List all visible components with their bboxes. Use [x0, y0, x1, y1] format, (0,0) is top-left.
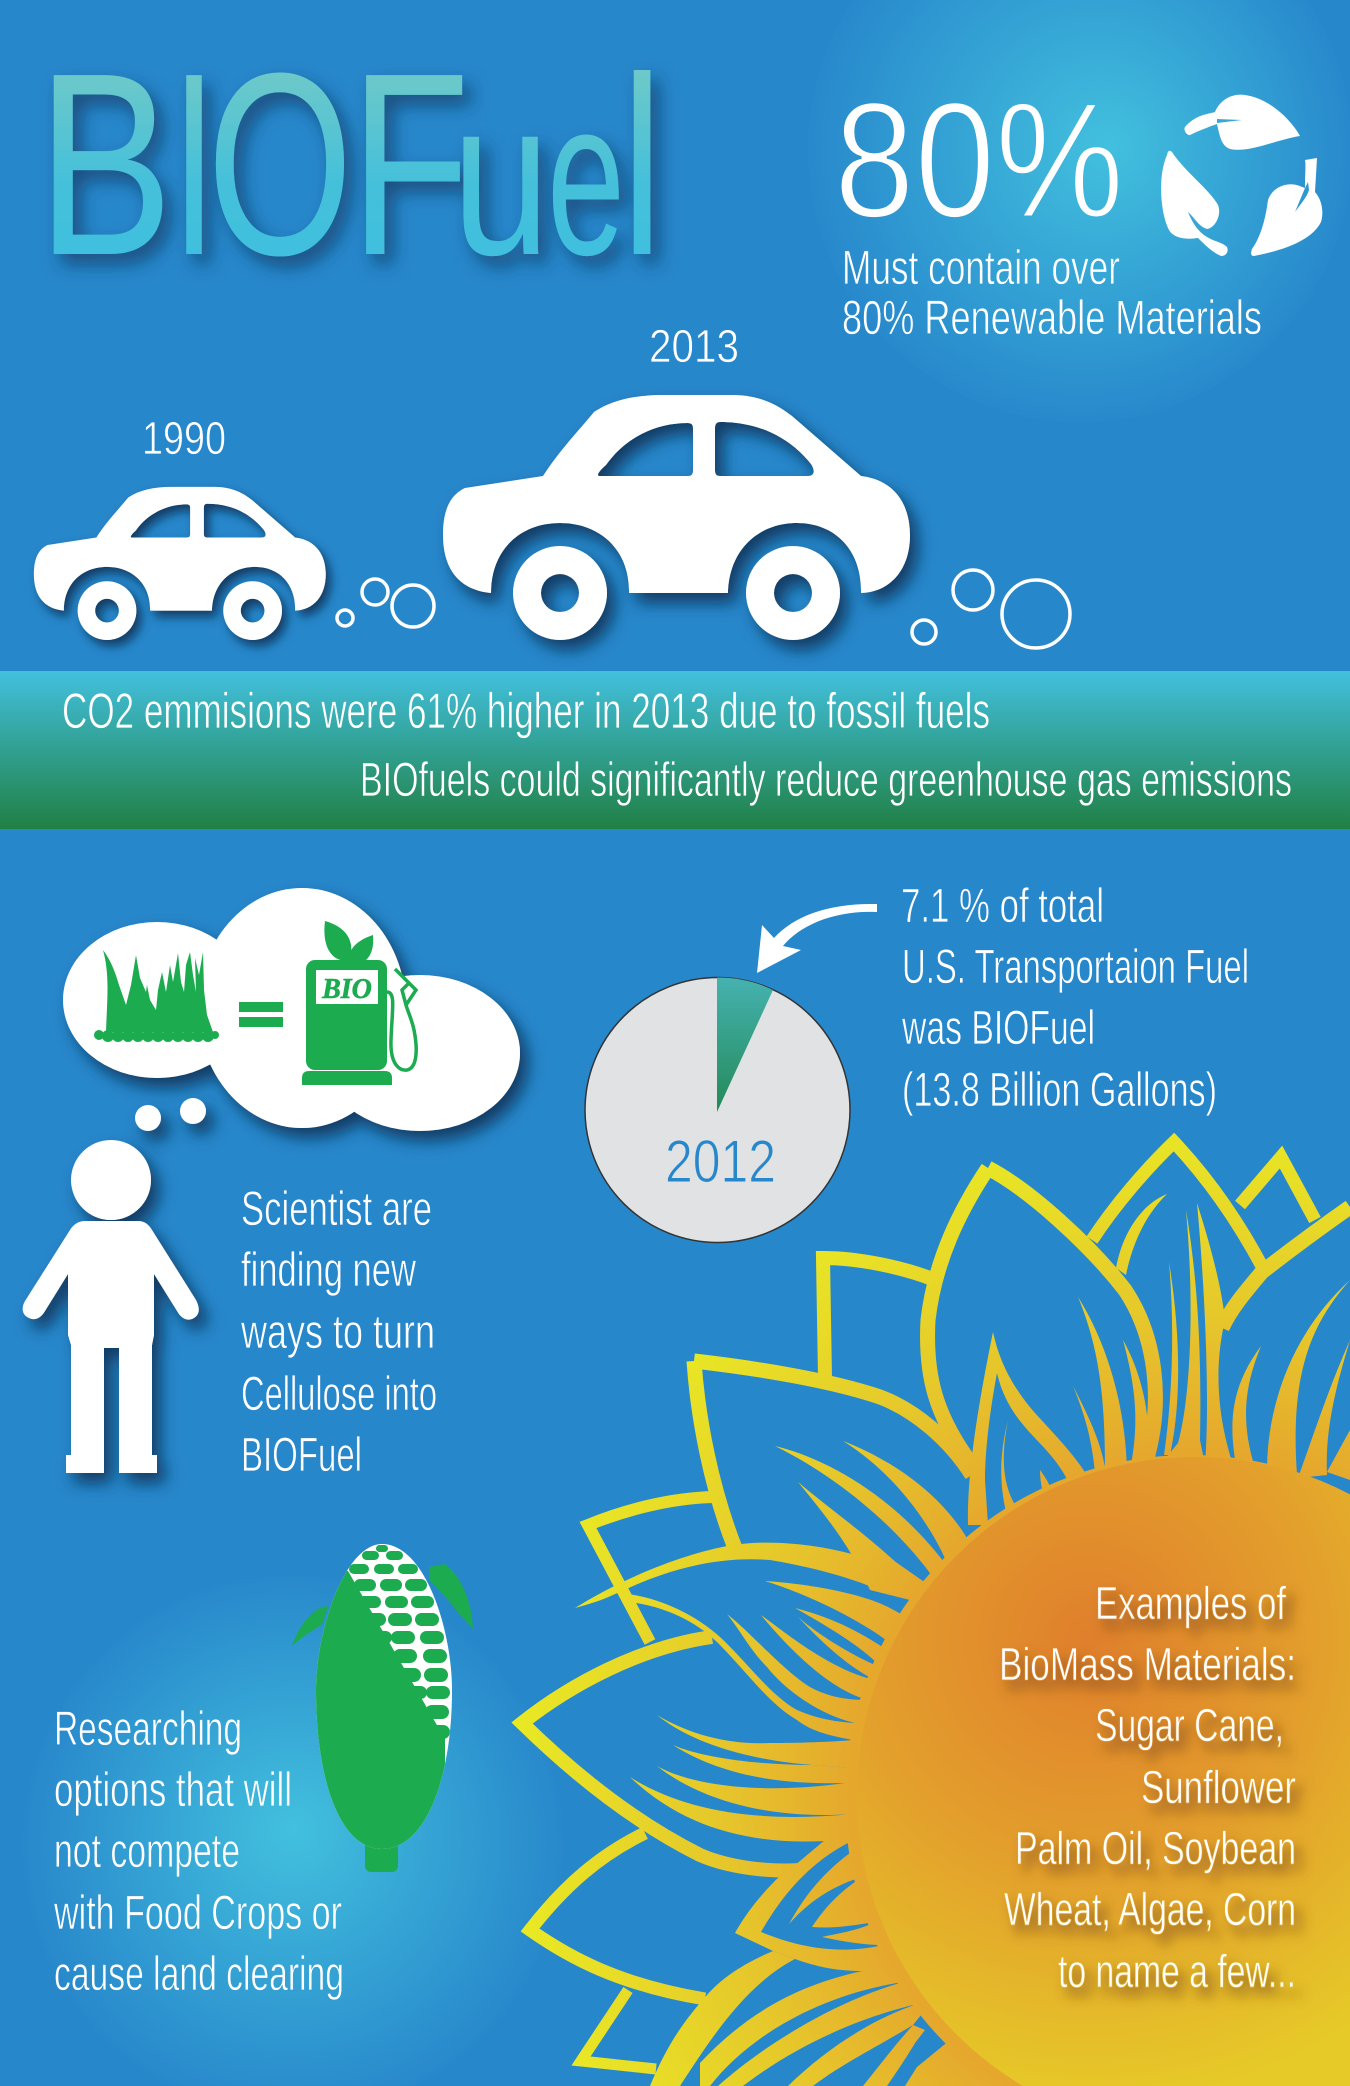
label: 2013: 2013 [649, 320, 739, 372]
label: 1990: 1990 [142, 412, 226, 464]
pie chart: 2012 [585, 978, 850, 1242]
exhaust bubbles: large car [912, 570, 1070, 648]
title: u [452, 54, 550, 302]
title: e [547, 54, 625, 302]
pie chart: 2012: 2012 [665, 1128, 776, 1195]
glow: top right [808, 0, 1350, 422]
text: transportation share: was BIOFuel [901, 1002, 1095, 1055]
text: food crops: Researching [54, 1703, 242, 1756]
text: scientist: finding new [241, 1244, 416, 1297]
sunflower centre [857, 1457, 1350, 2086]
petal blades: left [657, 1715, 885, 1770]
glow: bottom left [23, 1575, 563, 2086]
icon: bio fuel pump [302, 921, 416, 1085]
text: scientist [240, 1183, 437, 1482]
text: scientist: Cellulose into [241, 1368, 437, 1421]
title: l [621, 24, 663, 308]
text: scientist: ways to turn [240, 1306, 435, 1359]
title [37, 20, 663, 310]
title: F [350, 20, 470, 310]
icon: large car 2013 [443, 395, 910, 640]
petal outlines [928, 1168, 988, 1465]
thought cloud [63, 888, 520, 1131]
icon: bio fuel pump: BIO [321, 974, 372, 1005]
text: food crops: cause land clearing [54, 1948, 344, 2001]
icon: small car 1990 [34, 487, 326, 640]
petal blades: top [1197, 1203, 1233, 1465]
title: B [37, 20, 173, 310]
icon: person [23, 1140, 199, 1473]
title: O [207, 20, 353, 310]
text: scientist: Scientist are [241, 1183, 432, 1236]
illustration: sunflower petals [522, 1142, 1350, 2086]
text: food crops: not compete [54, 1825, 240, 1878]
text: scientist: BIOFuel [241, 1429, 362, 1482]
text: transportation share: (13.8 Billion Gallons) [902, 1064, 1217, 1117]
text: biomass examples: Sugar Cane, [1095, 1699, 1284, 1751]
text: biomass examples: Sunflower [1141, 1761, 1296, 1813]
text: food crops [53, 1703, 344, 2001]
icon: grass [94, 950, 219, 1042]
icon: recycling leaves [1161, 95, 1322, 256]
text: biomass examples [999, 1577, 1296, 1997]
banner: emissions: CO2 emmisions were 61% higher in 2013 due to fossil fuels [62, 683, 990, 739]
text: renewable materials [842, 242, 1262, 345]
text: transportation share: 7.1 % of total [901, 880, 1104, 933]
stat: 80 percent: 80% [834, 68, 1124, 252]
text: food crops: with Food Crops or [53, 1887, 342, 1940]
banner: emissions [0, 671, 1350, 829]
icon: corn [292, 1544, 473, 1872]
text: transportation share [901, 880, 1249, 1117]
text: renewable materials: Must contain over [842, 242, 1120, 295]
title: I [171, 20, 217, 310]
arrow [757, 904, 877, 973]
icon: equals sign [239, 1002, 283, 1027]
petal blades: upper left [775, 1446, 950, 1580]
exhaust bubbles: small car [337, 579, 434, 627]
petal blades: lower left [735, 1830, 920, 1980]
text: food crops: options that will [54, 1764, 292, 1817]
text: biomass examples: Examples of [1095, 1577, 1286, 1629]
